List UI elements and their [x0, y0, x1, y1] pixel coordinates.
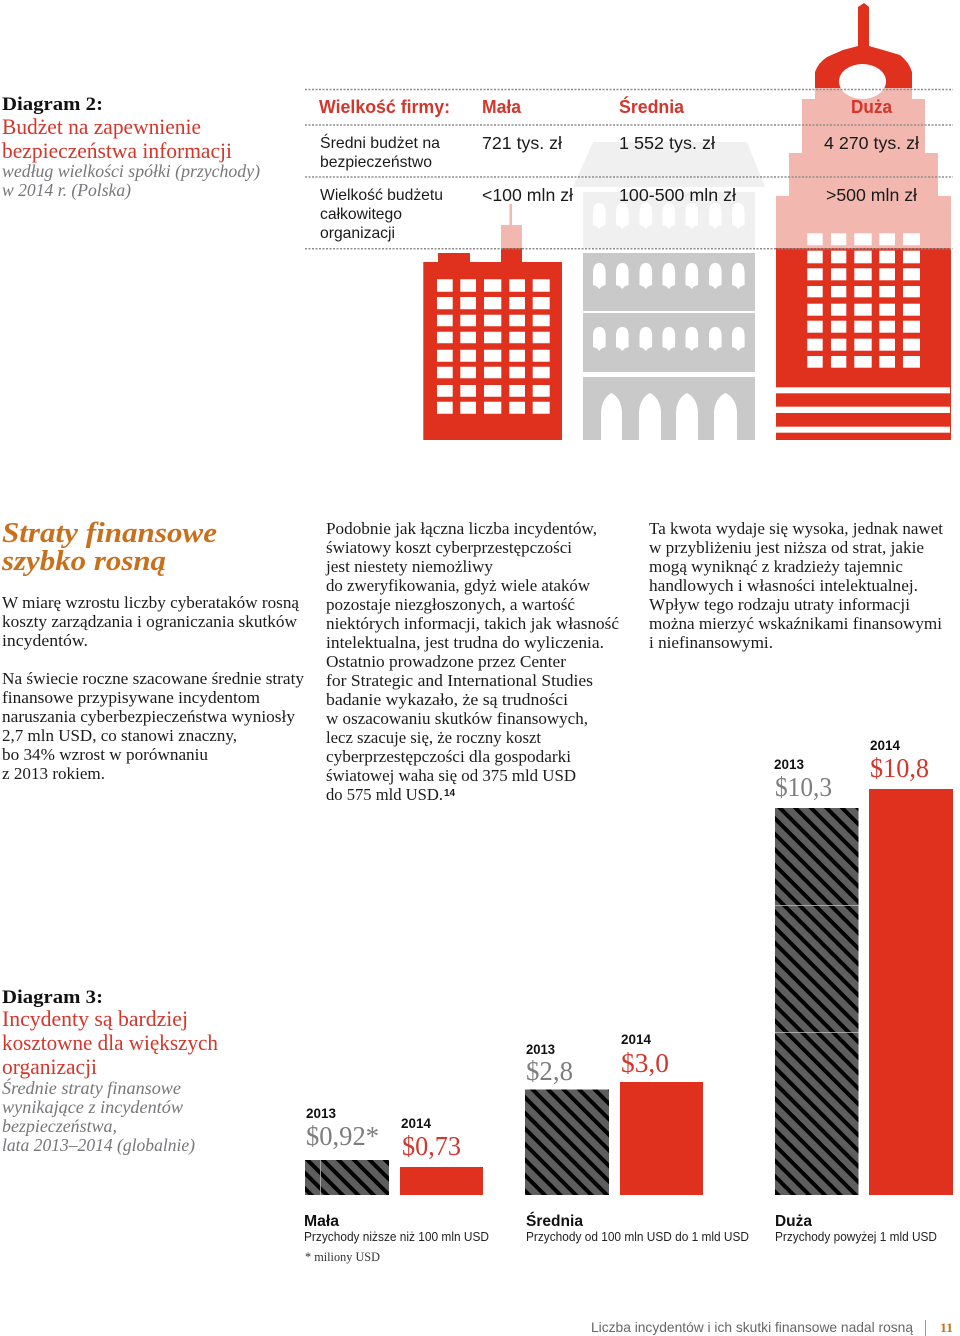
bar chart: small companies: $0,92*	[306, 1121, 379, 1151]
text block: column 2: w oszacowaniu skutków finansowych,	[326, 709, 588, 728]
text block: column 2: niektórych informacji, takich jak własność	[326, 614, 619, 633]
icon: grey historic building	[573, 142, 765, 440]
text block: column 2: do 575 mld USD.	[326, 785, 443, 804]
text block: column 1: naruszania cyberbezpieczeństwa wyniosły	[2, 707, 296, 726]
table: company size and budget: 721 tys. zł	[482, 133, 562, 153]
table: company size and budget: 4 270 tys. zł	[824, 133, 919, 153]
heading: Diagram 3: Incydenty są bardziej	[2, 1006, 188, 1031]
caption: large: Przychody powyżej 1 mld USD	[775, 1230, 937, 1244]
footer: 11	[940, 1321, 953, 1335]
bar chart: medium companies: 2014	[621, 1031, 651, 1047]
text block: column 3: i niefinansowymi.	[649, 633, 773, 652]
bar chart: small companies: $0,73	[402, 1131, 461, 1161]
text block: column 1: koszty zarządzania i ograniczania skutków	[2, 612, 297, 631]
bar chart: large companies: 2013	[774, 756, 804, 772]
text block: column 3: w przybliżeniu jest niższa od strat, jakie	[649, 538, 924, 557]
caption: large	[775, 1213, 937, 1244]
text block: column 3: Wpływ tego rodzaju utraty informacji	[649, 595, 910, 614]
bar chart: small companies	[305, 1105, 483, 1195]
heading: Diagram 2: według wielkości spółki (przychody)	[2, 161, 260, 181]
table: company size and budget: Średnia	[619, 96, 685, 117]
bar chart: large companies	[774, 737, 953, 1195]
heading: Diagram 3: Diagram 3:	[2, 988, 103, 1008]
icon: large red tower with dome	[776, 3, 951, 440]
caption: large: Duża	[775, 1213, 812, 1230]
heading: Diagram 3: bezpieczeństwa,	[2, 1116, 117, 1136]
bar chart: medium companies: $2,8	[526, 1056, 573, 1086]
bar chart: large companies: $10,8	[870, 753, 929, 783]
text block: column 2: intelektualna, jest trudna do wyliczenia.	[326, 633, 604, 652]
bar chart: large companies: 2014	[870, 737, 900, 753]
text block: column 2: Ostatnio prowadzone przez Center	[326, 652, 567, 671]
bar chart: medium companies: $3,0	[621, 1048, 669, 1078]
bar chart: medium companies	[525, 1031, 703, 1195]
heading: Diagram 2: Budżet na zapewnienie	[2, 114, 201, 139]
heading: Straty finansowe	[1, 518, 217, 577]
text block: column 2	[325, 519, 619, 804]
text block: column 2: światowej waha się od 375 mld USD	[326, 766, 576, 785]
text block: column 2: 14	[444, 788, 456, 799]
text block: column 1	[2, 593, 305, 783]
table: company size and budget: 1 552 tys. zł	[619, 133, 715, 153]
table: company size and budget: <100 mln zł	[482, 185, 573, 205]
heading: Diagram 3: wynikające z incydentów	[2, 1097, 183, 1117]
bar chart: small companies: 2014	[401, 1115, 431, 1131]
caption: small	[304, 1213, 489, 1264]
caption: medium	[526, 1211, 749, 1244]
heading: Diagram 2: bezpieczeństwa informacji	[2, 138, 232, 163]
text block: column 2: badanie wykazało, że są trudności	[326, 690, 568, 709]
text block: column 1: z 2013 rokiem.	[2, 764, 105, 783]
heading: Diagram 3: kosztowne dla większych	[2, 1030, 218, 1055]
text block: column 1: bo 34% wzrost w porównaniu	[2, 745, 208, 764]
table: company size and budget: całkowitego	[320, 206, 402, 223]
text block: column 2: for Strategic and International Studies	[326, 671, 593, 690]
heading: Diagram 2	[2, 95, 260, 200]
text block: column 2: pozostaje niezgłoszonych, a wartość	[326, 595, 575, 614]
text block: column 2: do zweryfikowania, gdyż wiele ataków	[326, 576, 590, 595]
text block: column 3: można mierzyć wskaźnikami finansowymi	[649, 614, 942, 633]
table: company size and budget: Wielkość firmy:	[319, 97, 450, 117]
heading: Diagram 3: lata 2013–2014 (globalnie)	[2, 1135, 195, 1155]
text block: column 3	[649, 519, 943, 652]
caption: medium: Średnia	[526, 1211, 583, 1230]
bar chart: large companies: $10,3	[775, 772, 832, 802]
caption: small: * miliony USD	[305, 1249, 380, 1264]
text block: column 1: Na świecie roczne szacowane średnie straty	[2, 669, 305, 688]
icon: small red office building	[423, 204, 562, 440]
text block: column 2: lecz szacuje się, że roczny koszt	[326, 728, 541, 747]
caption: small: Przychody niższe niż 100 mln USD	[304, 1230, 489, 1244]
text block: column 2: cyberprzestępczości dla gospodarki	[326, 747, 571, 766]
text block: column 1: 2,7 mln USD, co stanowi znaczny,	[2, 726, 237, 745]
table: company size and budget	[319, 96, 919, 242]
table: company size and budget: Mała	[482, 97, 522, 117]
heading: Diagram 3	[2, 988, 218, 1155]
text block: column 1: W miarę wzrostu liczby cyberataków rosną	[2, 593, 300, 612]
text block: column 3: mogą wyniknąć z kradzieży tajemnic	[649, 557, 903, 576]
heading: Straty finansowe: Straty finansowe	[2, 518, 217, 549]
table: company size and budget: 100-500 mln zł	[619, 185, 736, 205]
text block: column 3: Ta kwota wydaje się wysoka, jednak nawet	[649, 519, 943, 538]
text block: column 2: Podobnie jak łączna liczba incydentów,	[326, 519, 597, 538]
caption: medium: Przychody od 100 mln USD do 1 mld USD	[526, 1230, 749, 1244]
heading: Diagram 3: Średnie straty finansowe	[2, 1078, 181, 1098]
table: company size and budget: Wielkość budżetu	[320, 187, 443, 204]
table: company size and budget: organizacji	[320, 225, 395, 242]
footer: Liczba incydentów i ich skutki finansowe nadal rosną	[591, 1319, 913, 1335]
table: company size and budget: bezpieczeństwo	[320, 154, 432, 171]
text block: column 3: handlowych i własności intelektualnej.	[649, 576, 918, 595]
table: company size and budget: >500 mln zł	[826, 185, 917, 205]
text block: column 1: finansowe przypisywane incydentom	[2, 688, 260, 707]
heading: Straty finansowe: szybko rosną	[1, 546, 166, 577]
table: company size and budget: Średni budżet na	[320, 133, 440, 152]
heading: Diagram 2: w 2014 r. (Polska)	[2, 180, 131, 200]
text block: column 2: światowy koszt cyberprzestępczości	[326, 538, 572, 557]
text block: column 2: jest niestety niemożliwy	[325, 557, 494, 576]
text block: column 1: incydentów.	[2, 631, 88, 650]
bar chart: small companies: 2013	[306, 1105, 336, 1121]
bar chart: medium companies: 2013	[526, 1041, 555, 1057]
table: company size and budget: Duża	[851, 97, 893, 117]
heading: Diagram 2: Diagram 2:	[2, 95, 103, 115]
heading: Diagram 3: organizacji	[2, 1054, 97, 1079]
caption: small: Mała	[304, 1213, 339, 1230]
